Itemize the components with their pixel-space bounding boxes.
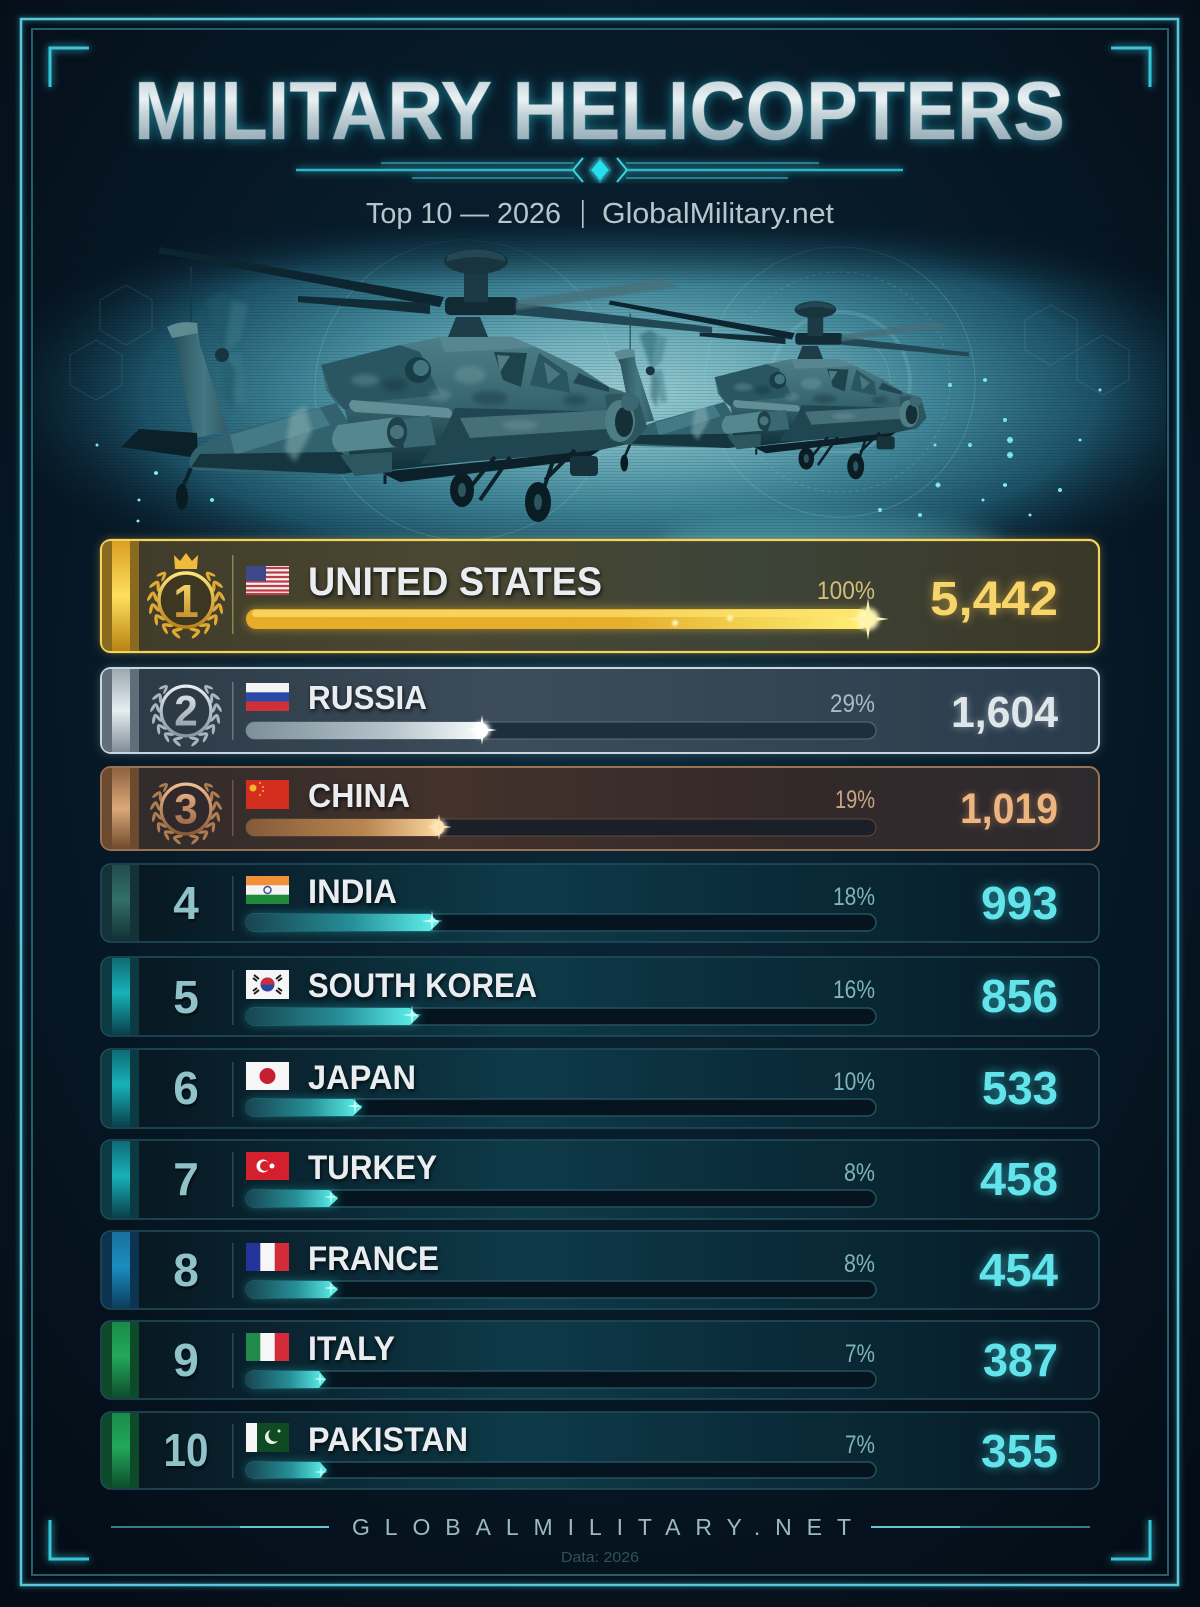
flag: South Korea: [246, 970, 289, 999]
helicopter image: rear helicopter: [585, 301, 969, 479]
title divider ornament: [296, 158, 903, 182]
progress bar: [246, 814, 876, 840]
flag: Pakistan: [246, 1423, 289, 1452]
panel: rank 3 China: [101, 767, 1099, 850]
panel: rank 6 Japan: [101, 1049, 1099, 1128]
panel: rank 4 India: 4: [173, 877, 199, 929]
progress bar: [246, 1190, 876, 1207]
percentage: 7%: [845, 1340, 875, 1368]
value: 5,442: [930, 573, 1058, 626]
value: 355: [981, 1425, 1058, 1477]
flag: Turkey: [246, 1152, 289, 1180]
panel: rank 9 Italy: [101, 1321, 1099, 1399]
medal: rank 1: [146, 553, 226, 640]
panel: rank 9 Italy: 9: [173, 1334, 199, 1386]
percentage: 100%: [817, 577, 875, 605]
panel: rank 6 Japan: 6: [173, 1062, 199, 1114]
progress bar: [246, 1371, 876, 1388]
panel: rank 10 Pakistan: [101, 1412, 1099, 1489]
flag: Russia: [246, 683, 289, 711]
footer brand with side lines: GLOBALMILITARY.NET: [352, 1514, 851, 1540]
medal: rank 3: [149, 782, 223, 845]
value: 454: [979, 1244, 1058, 1296]
panel: rank 4 India: [101, 864, 1099, 942]
progress bar: [246, 910, 876, 932]
medal: rank 1: 1: [173, 575, 199, 627]
subtitle: [366, 198, 834, 230]
percentage: 18%: [833, 883, 875, 911]
percentage: 29%: [830, 690, 875, 718]
helicopter image: front helicopter: [121, 247, 712, 522]
panel: rank 8 France: [101, 1231, 1099, 1309]
panel: rank 8 France: 8: [173, 1244, 199, 1296]
subtitle: Top 10 — 2026: [366, 198, 561, 230]
panel: rank 7 Turkey: 7: [173, 1153, 199, 1205]
value: 1,019: [960, 785, 1058, 833]
hero glow background: [34, 232, 1166, 539]
progress bar: [246, 715, 876, 745]
progress bar: [246, 598, 889, 640]
progress bar: [246, 1098, 876, 1116]
panel: rank 1 United States: [101, 540, 1099, 652]
flag: China: [246, 780, 289, 809]
subtitle: GlobalMilitary.net: [602, 198, 834, 230]
panel: rank 5 South Korea: 5: [173, 971, 199, 1023]
flag: India: [246, 876, 289, 904]
percentage: 7%: [845, 1431, 875, 1459]
footer data note: Data: 2026: [561, 1549, 639, 1566]
medal: rank 2: [149, 684, 223, 747]
country name: FRANCE: [308, 1240, 439, 1278]
value: 533: [982, 1062, 1058, 1114]
medal: rank 3: 3: [174, 786, 198, 833]
country name: INDIA: [308, 873, 397, 911]
flag: France: [246, 1243, 289, 1271]
flag: Italy: [246, 1333, 289, 1361]
value: 387: [983, 1334, 1058, 1386]
percentage: 16%: [833, 976, 875, 1004]
flag: United States: [246, 566, 289, 595]
panel: rank 5 South Korea: [101, 957, 1099, 1036]
country name: TURKEY: [308, 1149, 437, 1187]
country name: UNITED STATES: [308, 560, 602, 604]
country name: JAPAN: [308, 1059, 416, 1097]
country name: SOUTH KOREA: [308, 967, 537, 1005]
flag: Japan: [246, 1062, 289, 1090]
percentage: 8%: [844, 1159, 875, 1187]
panel: rank 7 Turkey: [101, 1140, 1099, 1219]
percentage: 8%: [844, 1250, 875, 1278]
percentage: 10%: [833, 1068, 875, 1096]
country name: CHINA: [308, 777, 410, 814]
country name: ITALY: [308, 1330, 395, 1368]
progress bar: [246, 1005, 876, 1025]
value: 856: [981, 970, 1058, 1022]
percentage: 19%: [835, 786, 875, 814]
title: MILITARY HELICOPTERS: [134, 64, 1065, 157]
medal: rank 2: 2: [174, 688, 198, 735]
value: 993: [981, 877, 1058, 929]
progress bar: [246, 1280, 876, 1298]
value: 1,604: [951, 688, 1059, 737]
value: 458: [980, 1153, 1058, 1205]
panel: rank 2 Russia: [101, 668, 1099, 753]
country name: PAKISTAN: [308, 1421, 468, 1459]
panel: rank 10 Pakistan: 10: [164, 1424, 208, 1476]
progress bar: [246, 1462, 876, 1479]
country name: RUSSIA: [308, 679, 427, 716]
